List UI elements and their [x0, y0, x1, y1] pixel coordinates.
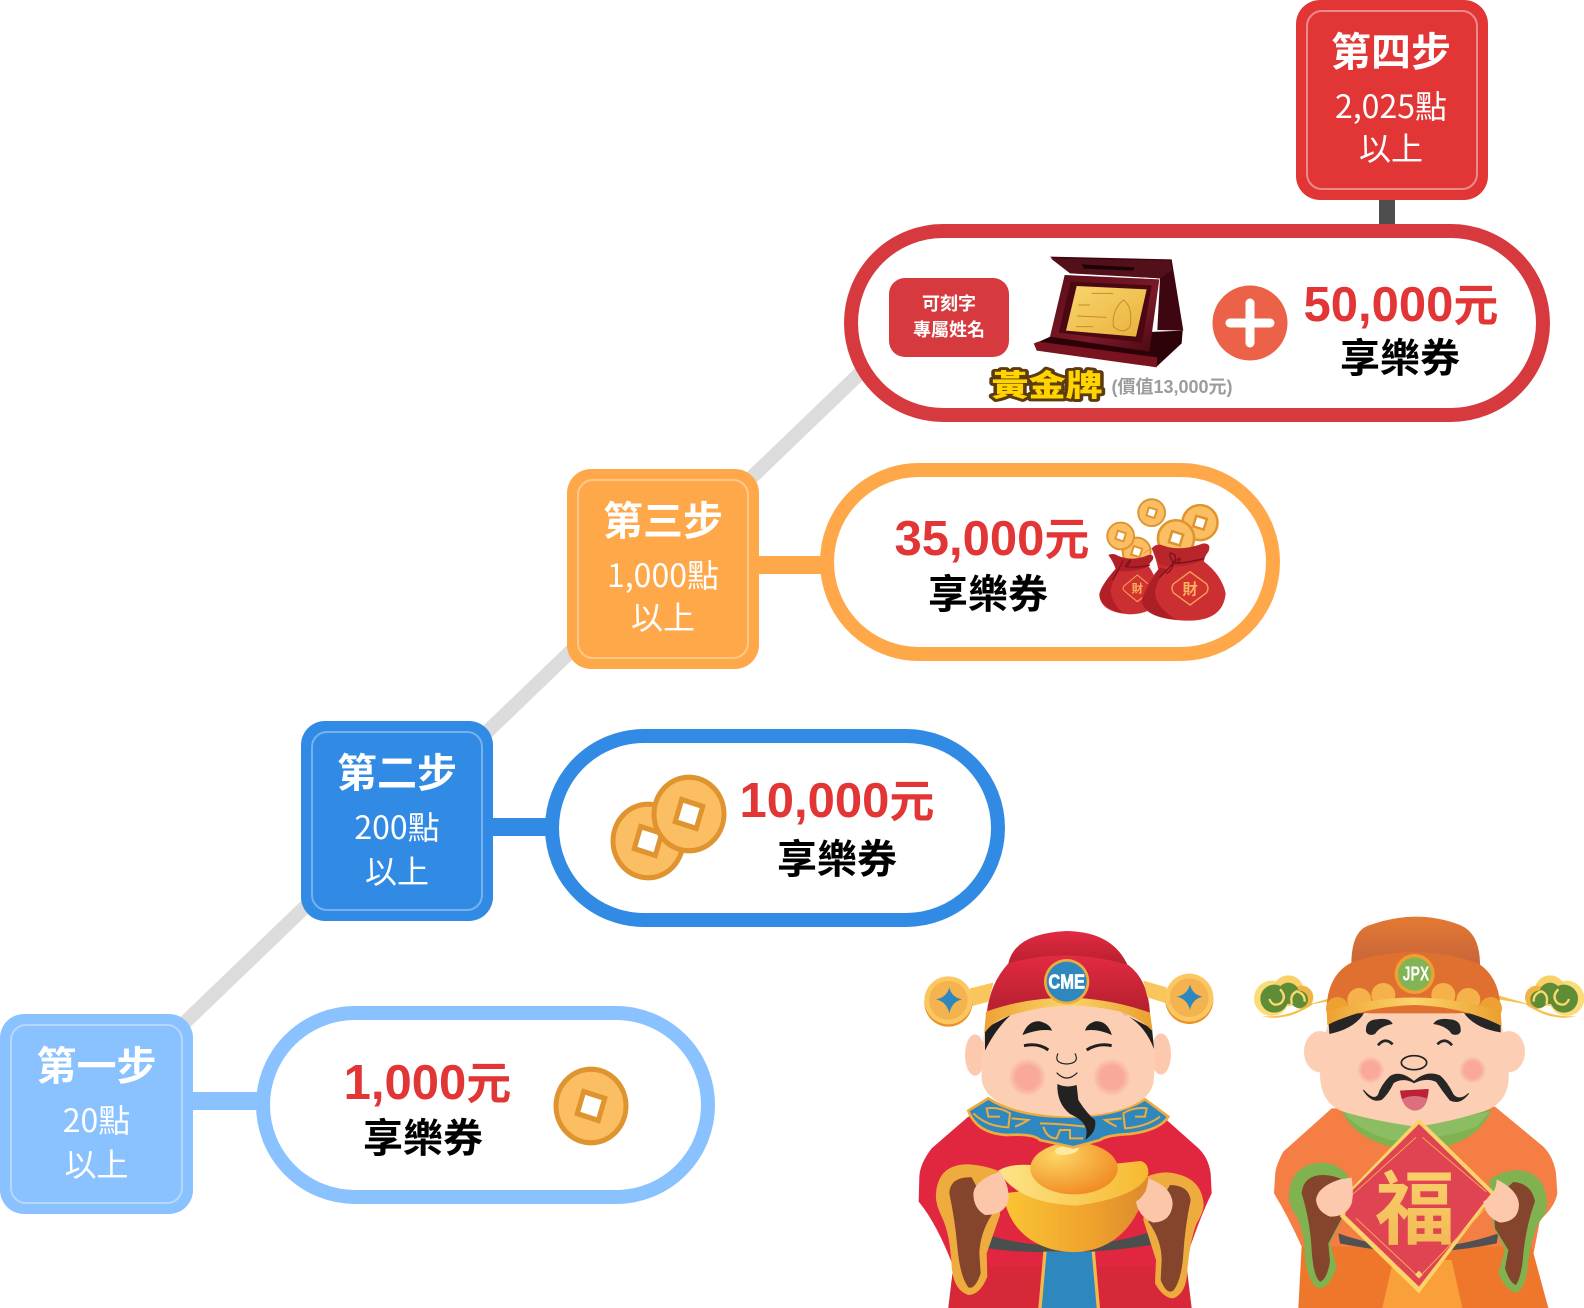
step 3 points: 1,000點: [607, 551, 719, 597]
panel: reward 1: [263, 1013, 708, 1197]
step 4 condition: 以上: [1359, 124, 1423, 170]
robe: [919, 1117, 1212, 1308]
ears: [1304, 1031, 1336, 1072]
step 3 condition: 以上: [631, 593, 695, 639]
panel: step 4: [1296, 0, 1488, 200]
brows: [1366, 1019, 1461, 1035]
amount 3: 35,000元: [895, 512, 1089, 566]
panel: step 3: [567, 469, 759, 669]
step 4 connector: [1379, 198, 1395, 228]
icon: gold plaque: [1034, 257, 1183, 367]
step 2 title: 第二步: [337, 741, 457, 799]
fu character: 福: [1375, 1145, 1455, 1261]
title: gold plaque: 黃金牌: [991, 361, 1103, 405]
voucher label 1: 享樂券: [363, 1117, 483, 1161]
panel: reward 2: [552, 736, 998, 920]
diagonal path line: [150, 354, 880, 1056]
illustration: god of wealth CME: [919, 931, 1213, 1308]
robe: [1274, 1107, 1557, 1308]
head: [982, 1002, 1154, 1117]
icon: money bags: [1099, 499, 1226, 621]
icon: coin: [556, 1069, 626, 1143]
step 1 title: 第一步: [36, 1034, 156, 1092]
step 2 points: 200點: [354, 803, 440, 849]
step 2 connector: [490, 818, 562, 836]
icon: plus: [1212, 286, 1288, 360]
step 2 condition: 以上: [365, 847, 429, 893]
hat wings: [924, 974, 1213, 1027]
badge: JPX: [1395, 954, 1435, 994]
right sleeve: [1489, 1170, 1547, 1293]
brows: [1023, 1021, 1112, 1035]
eyes: [1024, 1045, 1112, 1050]
plaque value: (價值13,000元): [1111, 377, 1233, 397]
belt: [1338, 1233, 1498, 1252]
fu diamond: [1340, 1118, 1496, 1293]
beard: [1057, 1084, 1095, 1140]
nose: [1401, 1056, 1427, 1070]
step 1 connector: [190, 1092, 262, 1110]
badge: JPX: JPX: [1403, 964, 1430, 986]
left sleeve: [936, 1164, 1000, 1295]
amount 2: 10,000元: [740, 774, 934, 828]
badge line 1: 可刻字: [922, 293, 976, 314]
right sleeve: [1143, 1172, 1204, 1298]
amount 1: 1,000元: [344, 1056, 511, 1110]
icon label: 財: [1182, 577, 1198, 599]
hat: [984, 931, 1153, 1033]
hair: [985, 1013, 1154, 1051]
badge: CME: CME: [1048, 972, 1085, 994]
collar: [968, 1098, 1168, 1147]
badge: engraving: [889, 278, 1009, 357]
badge line 2: 專屬姓名: [913, 320, 985, 340]
mouth: [1400, 1089, 1429, 1111]
small bag label: 財: [1132, 581, 1143, 597]
ears: [965, 1034, 985, 1076]
gold ingot: [998, 1142, 1148, 1252]
step 3 connector: [755, 556, 827, 574]
icon: two coins: [613, 777, 724, 878]
moustache: [1363, 1074, 1469, 1101]
panel: step 1: [0, 1014, 193, 1214]
panel: step 2: [301, 721, 493, 921]
hair: [1329, 1010, 1501, 1034]
badge: CME: [1044, 959, 1089, 1004]
amount 4: 50,000元: [1304, 278, 1498, 332]
step 3 title: 第三步: [603, 489, 723, 547]
hands: [973, 1172, 1009, 1215]
nose and mouth: [1057, 1053, 1077, 1078]
hands: [1316, 1178, 1353, 1217]
panel: reward 4: [851, 231, 1543, 415]
step 4 points: 2,025點: [1335, 82, 1447, 128]
voucher label 4: 享樂券: [1340, 337, 1460, 381]
hat ornament right: [1498, 975, 1584, 1018]
collar: [1342, 1111, 1492, 1147]
step 1 condition: 以上: [64, 1140, 129, 1186]
hat: [1326, 917, 1502, 1026]
head: [1320, 1010, 1509, 1127]
left sleeve: [1289, 1163, 1348, 1288]
hat ornament left: [1254, 975, 1340, 1018]
step 1 points: 20點: [63, 1096, 130, 1142]
eyes: [1378, 1041, 1452, 1045]
voucher label 3: 享樂券: [928, 573, 1048, 617]
voucher label 2: 享樂券: [777, 838, 897, 882]
panel: reward 3: [827, 470, 1273, 654]
step 4 title: 第四步: [1331, 20, 1451, 78]
illustration: god of wealth JPX: [1254, 917, 1584, 1308]
